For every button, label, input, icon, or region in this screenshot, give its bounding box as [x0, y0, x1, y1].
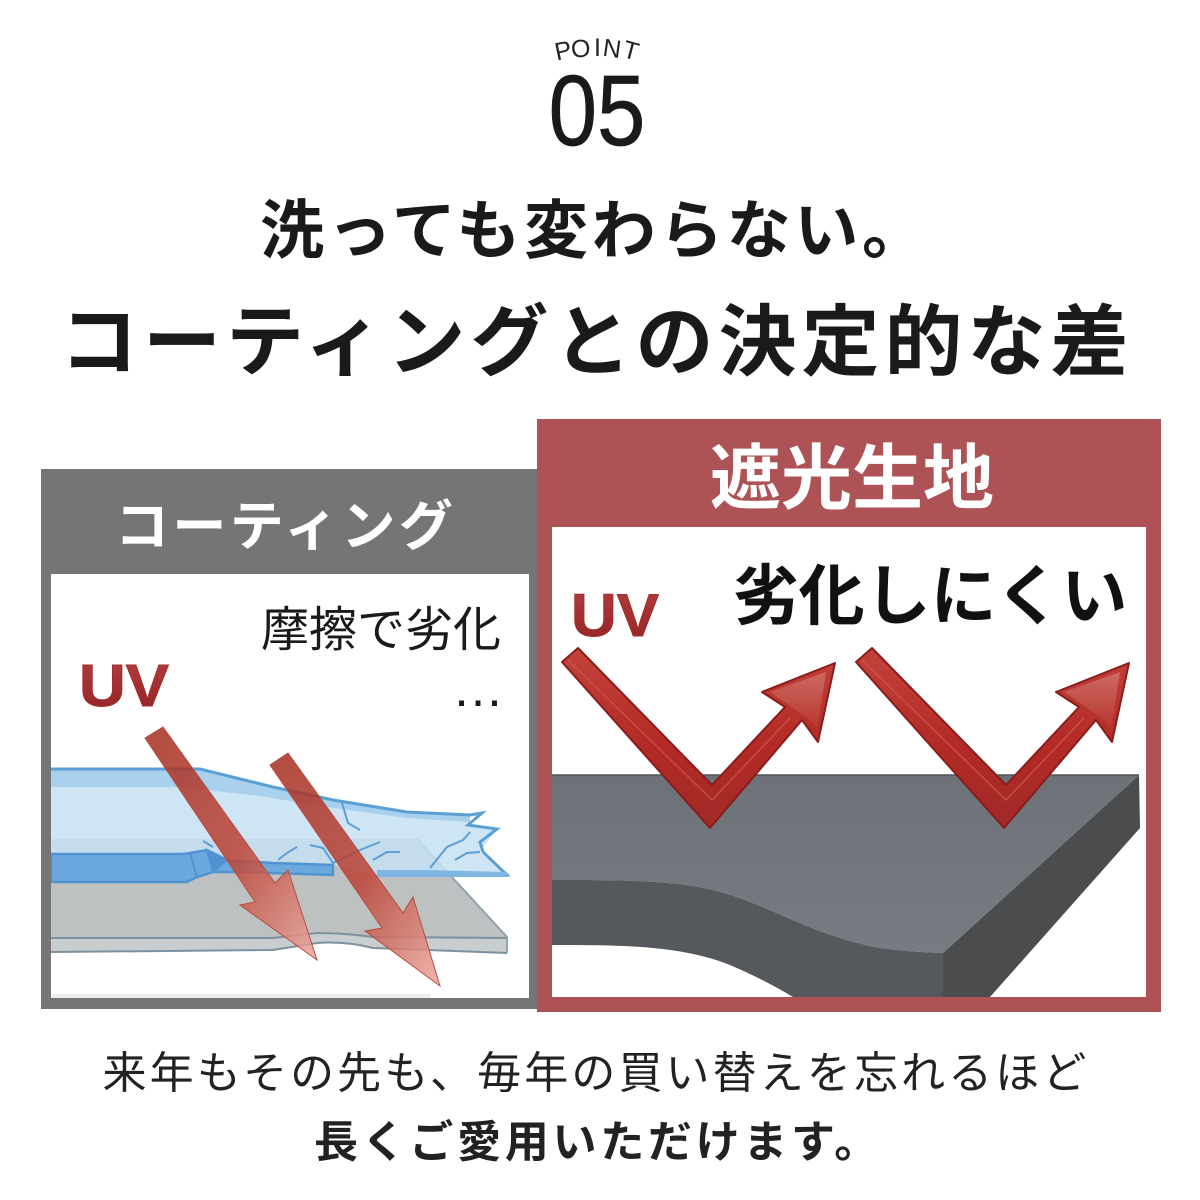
- reflected arrow 2: [856, 648, 1129, 828]
- reflected arrow 1: [562, 648, 835, 828]
- point label: [552, 34, 642, 67]
- blackout illustration: [552, 527, 1146, 997]
- UV label: UV: [79, 653, 169, 719]
- UV label: UV: [571, 582, 659, 649]
- point label: I: [594, 34, 601, 62]
- heading line 2: コーティングとの決定的な差: [60, 298, 1134, 386]
- grey base plate: [51, 839, 507, 953]
- arrow 2: [270, 753, 440, 986]
- closing text line 2: 長くご愛用いただけます。: [314, 1118, 882, 1167]
- point label: T: [620, 36, 642, 67]
- point label: O: [570, 34, 592, 64]
- dark slab: [552, 775, 1140, 997]
- arrow 1: [145, 727, 317, 960]
- heading line 1: 洗っても変わらない。: [260, 195, 930, 267]
- panel: coating: [41, 469, 537, 1009]
- callout: resists wear: 劣化しにくい: [733, 559, 1127, 633]
- point number: 05: [549, 55, 645, 167]
- blue coating layer: [51, 768, 507, 882]
- closing text line 1: 来年もその先も、毎年の買い替えを忘れるほど: [103, 1049, 1089, 1098]
- panel: blackout fabric: [537, 419, 1161, 1012]
- point label: N: [601, 34, 623, 64]
- panel heading: blackout fabric: 遮光生地: [710, 440, 994, 519]
- coating illustration: [51, 574, 529, 998]
- ellipsis: …: [452, 660, 504, 718]
- point label: P: [552, 36, 574, 66]
- panel heading: coating: コーティング: [115, 497, 456, 557]
- callout: wears from friction: 摩擦で劣化: [261, 604, 501, 657]
